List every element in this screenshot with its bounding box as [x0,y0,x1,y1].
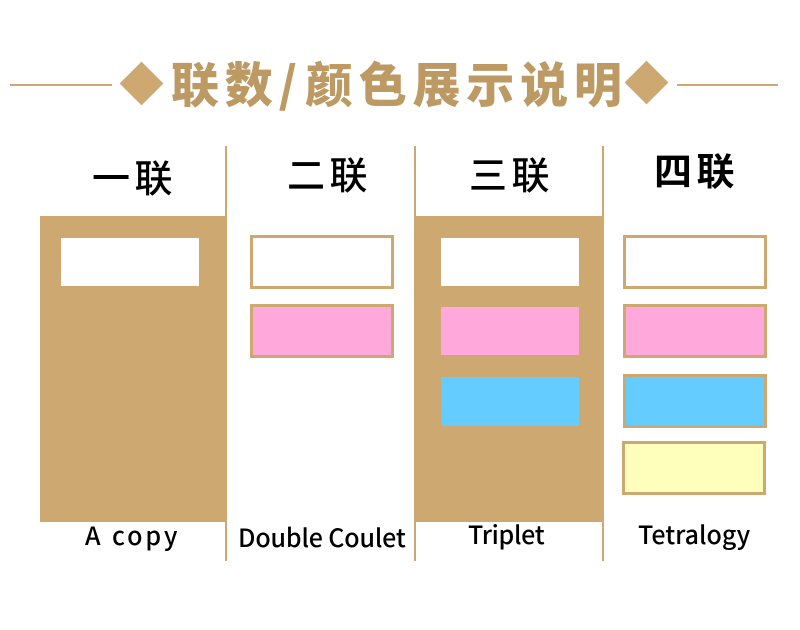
english label: Triplet: Triplet [468,516,544,552]
white sheet [441,238,579,286]
heading: two copies: 二联 [287,145,372,200]
pink sheet [623,304,767,358]
tan block: three copies [415,216,603,522]
title: 联数/颜色展示说明 [171,46,628,116]
title [10,46,778,116]
english label: Double Coulet: Double Coulet [238,519,406,555]
panel: three copies [416,145,602,552]
pink sheet [250,304,394,358]
heading: three copies: 三联 [469,145,554,200]
heading: one copy: 一联 [92,148,177,203]
english label: Tetralogy: Tetralogy [638,516,750,552]
white sheet [61,238,199,286]
panel: four copies [622,141,767,552]
white sheet [623,235,767,289]
white sheet [250,235,394,289]
column dividers [225,146,604,561]
panel: one copy [40,148,225,553]
heading: four copies: 四联 [654,141,739,196]
tan block: one copy [40,216,226,522]
blue sheet [623,374,767,428]
yellow sheet [622,441,766,495]
pink sheet [441,307,579,355]
english label: A copy: A copy [85,517,180,553]
panel: two copies [238,145,406,555]
blue sheet [441,377,579,426]
